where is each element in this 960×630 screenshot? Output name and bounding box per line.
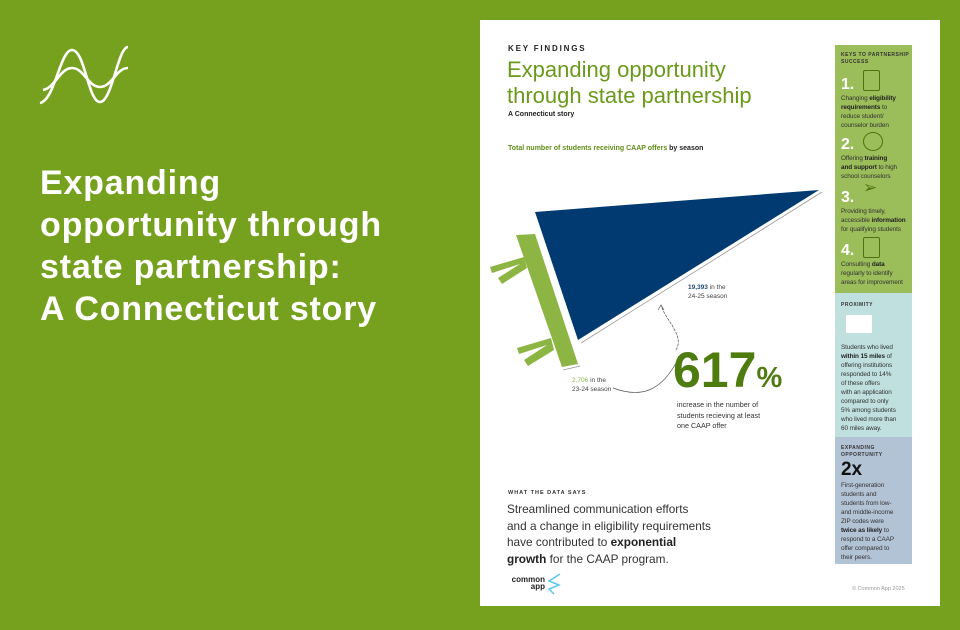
pennant chart [490, 190, 822, 393]
document page [480, 20, 940, 606]
sidebar: expanding opportunity: OPPORTUNITY [841, 452, 883, 458]
icon: CT map [846, 315, 872, 333]
left title: Expanding [40, 164, 221, 202]
label 24-25: 24-25 season [688, 293, 727, 300]
item 4: regularly to identify [841, 270, 893, 277]
item 4: areas for improvement [841, 279, 903, 286]
doc title: Expanding opportunity [507, 57, 726, 82]
item 2: and support to high [841, 164, 897, 171]
common app logo: common [512, 575, 545, 584]
item 4: 4. [841, 242, 854, 259]
item 1: 1. [841, 76, 854, 93]
label 24-25 [688, 284, 727, 300]
stat description [677, 400, 760, 430]
item 3: Providing timely, [841, 208, 886, 215]
sidebar: expanding opportunity: First-generation [841, 482, 884, 489]
copyright: © Common App 2025 [852, 586, 905, 592]
sidebar: expanding opportunity: 2x [841, 459, 862, 480]
sidebar: keys: ➢ [863, 178, 877, 197]
sidebar: expanding opportunity: twice as likely to [841, 527, 889, 534]
item 4: Consulting data [841, 261, 885, 268]
item 2: 2. [841, 136, 854, 153]
data text: Streamlined communication efforts [507, 502, 688, 516]
sidebar: proximity: 60 miles away. [841, 425, 881, 432]
item 2: Offering training [841, 155, 887, 162]
stat description: one CAAP offer [677, 421, 727, 430]
item 1: requirements to [841, 104, 887, 111]
big stat 617%: 617% [673, 342, 782, 398]
logo: waves [40, 46, 128, 104]
sidebar: proximity: within 15 miles of [841, 353, 892, 360]
sidebar: proximity: PROXIMITY [841, 302, 873, 308]
sidebar: proximity: compared to only [841, 398, 888, 405]
sidebar: proximity: with an application [841, 389, 892, 396]
key findings heading: KEY FINDINGS [508, 44, 586, 53]
sidebar: keys: SUCCESS [841, 59, 869, 65]
sidebar: expanding opportunity: respond to a CAAP [841, 536, 894, 543]
doc title [507, 57, 752, 108]
stat description: increase in the number of [677, 400, 758, 409]
subtitle: A Connecticut story [508, 111, 574, 118]
doc title: through state partnership [507, 83, 752, 108]
common app logo: app [531, 582, 545, 591]
label 23-24: 2,706 in the [572, 377, 606, 384]
data text: and a change in eligibility requirements [507, 519, 711, 533]
label 24-25: 19,393 in the [688, 284, 726, 291]
sidebar: expanding opportunity: students from low- [841, 500, 891, 507]
item 1: Changing eligibility [841, 95, 896, 102]
sidebar: expanding opportunity: ZIP codes were [841, 518, 884, 525]
sidebar: expanding opportunity [835, 437, 912, 564]
what the data says: WHAT THE DATA SAYS [508, 490, 586, 496]
sidebar: proximity: who lived more than [841, 416, 896, 423]
sidebar: keys [835, 45, 912, 293]
stat description: students recieving at least [677, 410, 760, 420]
item 3 [841, 178, 906, 233]
sidebar: expanding opportunity: offer compared to [841, 545, 889, 552]
data text [507, 502, 711, 566]
sidebar: proximity: Students who lived [841, 344, 893, 351]
data text: growth for the CAAP program. [507, 552, 669, 566]
item 3: 3. [841, 189, 854, 206]
item 3: accessible information [841, 217, 906, 224]
left title: A Connecticut story [40, 290, 377, 328]
common app logo [512, 573, 561, 594]
item 3: for qualifying students [841, 226, 901, 233]
data text: have contributed to exponential [507, 535, 676, 549]
sidebar: proximity: 5% among students [841, 407, 896, 414]
sidebar: expanding opportunity: their peers. [841, 554, 872, 561]
chart title: Total number of students receiving CAAP offers by season [508, 145, 703, 152]
left title [40, 164, 382, 328]
item 4 [841, 237, 903, 286]
item 1: counselor burden [841, 122, 889, 129]
left title: state partnership: [40, 248, 342, 286]
left title: opportunity through [40, 206, 382, 244]
item 1 [841, 70, 896, 129]
sidebar: proximity: responded to 14% [841, 371, 891, 378]
item 1: reduce student/ [841, 113, 884, 120]
sidebar: proximity [835, 293, 912, 437]
sidebar: expanding opportunity: students and [841, 491, 876, 498]
label 23-24 [572, 377, 611, 393]
sidebar: proximity: offering institutions [841, 362, 892, 369]
item 2 [841, 132, 897, 180]
sidebar: proximity: of these offers [841, 380, 880, 387]
sidebar: keys: KEYS TO PARTNERSHIP [841, 52, 909, 58]
label 23-24: 23-24 season [572, 386, 611, 393]
sidebar: expanding opportunity: and middle-income [841, 509, 893, 516]
item 2: school counselors [841, 173, 890, 180]
sidebar: expanding opportunity: EXPANDING [841, 445, 875, 451]
